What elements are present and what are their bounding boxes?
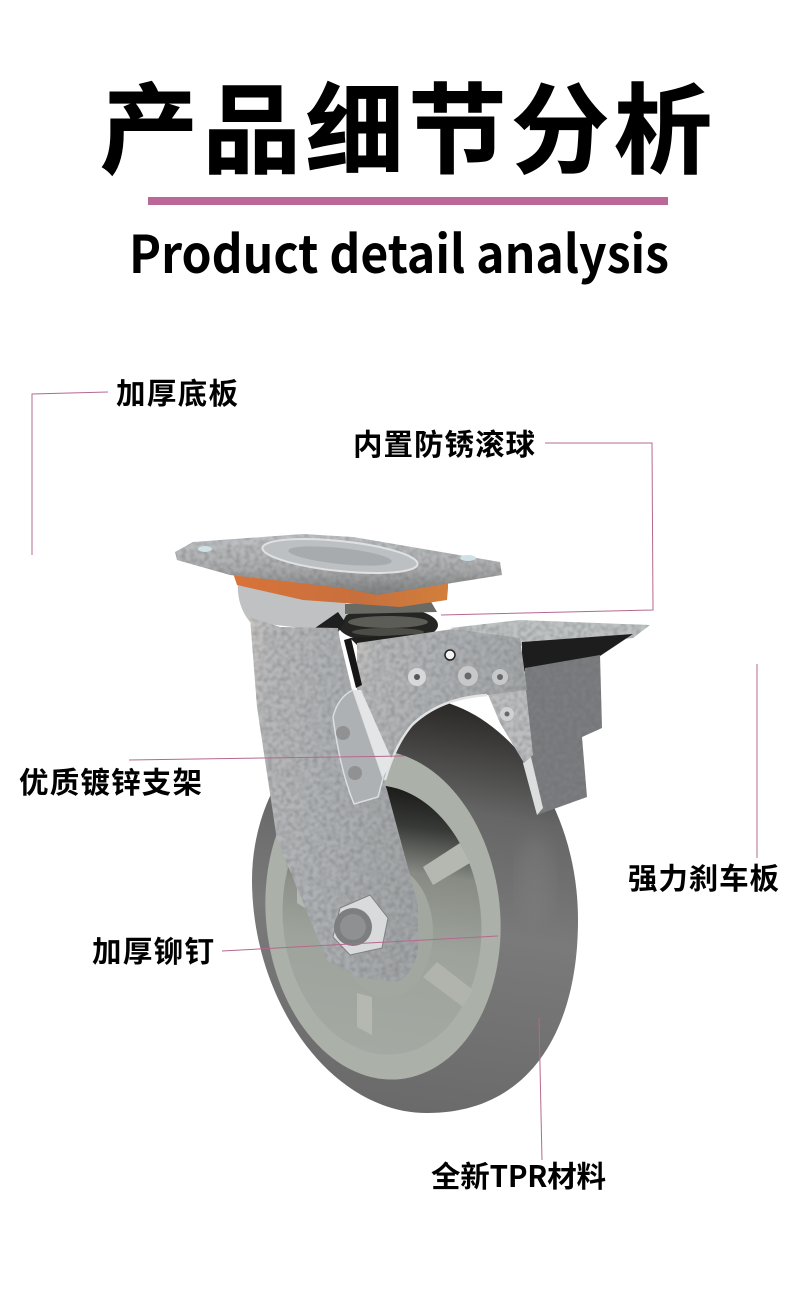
label: base plate: 加厚底板 <box>116 371 238 413</box>
orange ring <box>232 570 448 607</box>
brake pedal shadow <box>522 634 633 672</box>
leader line: ball bearings <box>441 443 653 615</box>
label: ball bearings: 内置防锈滚球 <box>353 422 535 464</box>
caster illustration <box>175 533 650 1113</box>
brake top plate <box>450 620 650 648</box>
label: brake: 强力刹车板 <box>628 856 779 898</box>
link plate <box>333 690 392 804</box>
side bracket <box>357 629 527 785</box>
bracket rivets <box>408 650 514 721</box>
mounting plate <box>175 533 502 595</box>
label: rivet: 加厚铆钉 <box>92 929 214 971</box>
title underline <box>148 197 668 205</box>
brake pedal <box>523 655 602 815</box>
label: TPR: 全新TPR材料 <box>431 1154 606 1196</box>
wheel rim <box>249 739 517 1091</box>
leader line: base plate <box>32 392 108 555</box>
brake bracket <box>487 690 533 763</box>
wheel tyre <box>252 697 578 1113</box>
axle bolt <box>333 895 388 955</box>
leader line: bracket <box>129 756 404 760</box>
fork arm <box>250 617 418 982</box>
leader line: rivet <box>222 936 498 951</box>
leader line: brake <box>756 664 758 858</box>
bracket arc highlight <box>385 695 487 780</box>
brake pedal edge <box>523 757 543 815</box>
swivel neck <box>238 580 437 637</box>
subtitle: Product detail analysis <box>129 213 669 288</box>
label: bracket: 优质镀锌支架 <box>19 760 202 802</box>
black slit <box>344 638 362 688</box>
bearing <box>338 607 455 648</box>
leader line: TPR <box>539 1018 542 1160</box>
title: 产品细节分析 <box>100 52 712 194</box>
